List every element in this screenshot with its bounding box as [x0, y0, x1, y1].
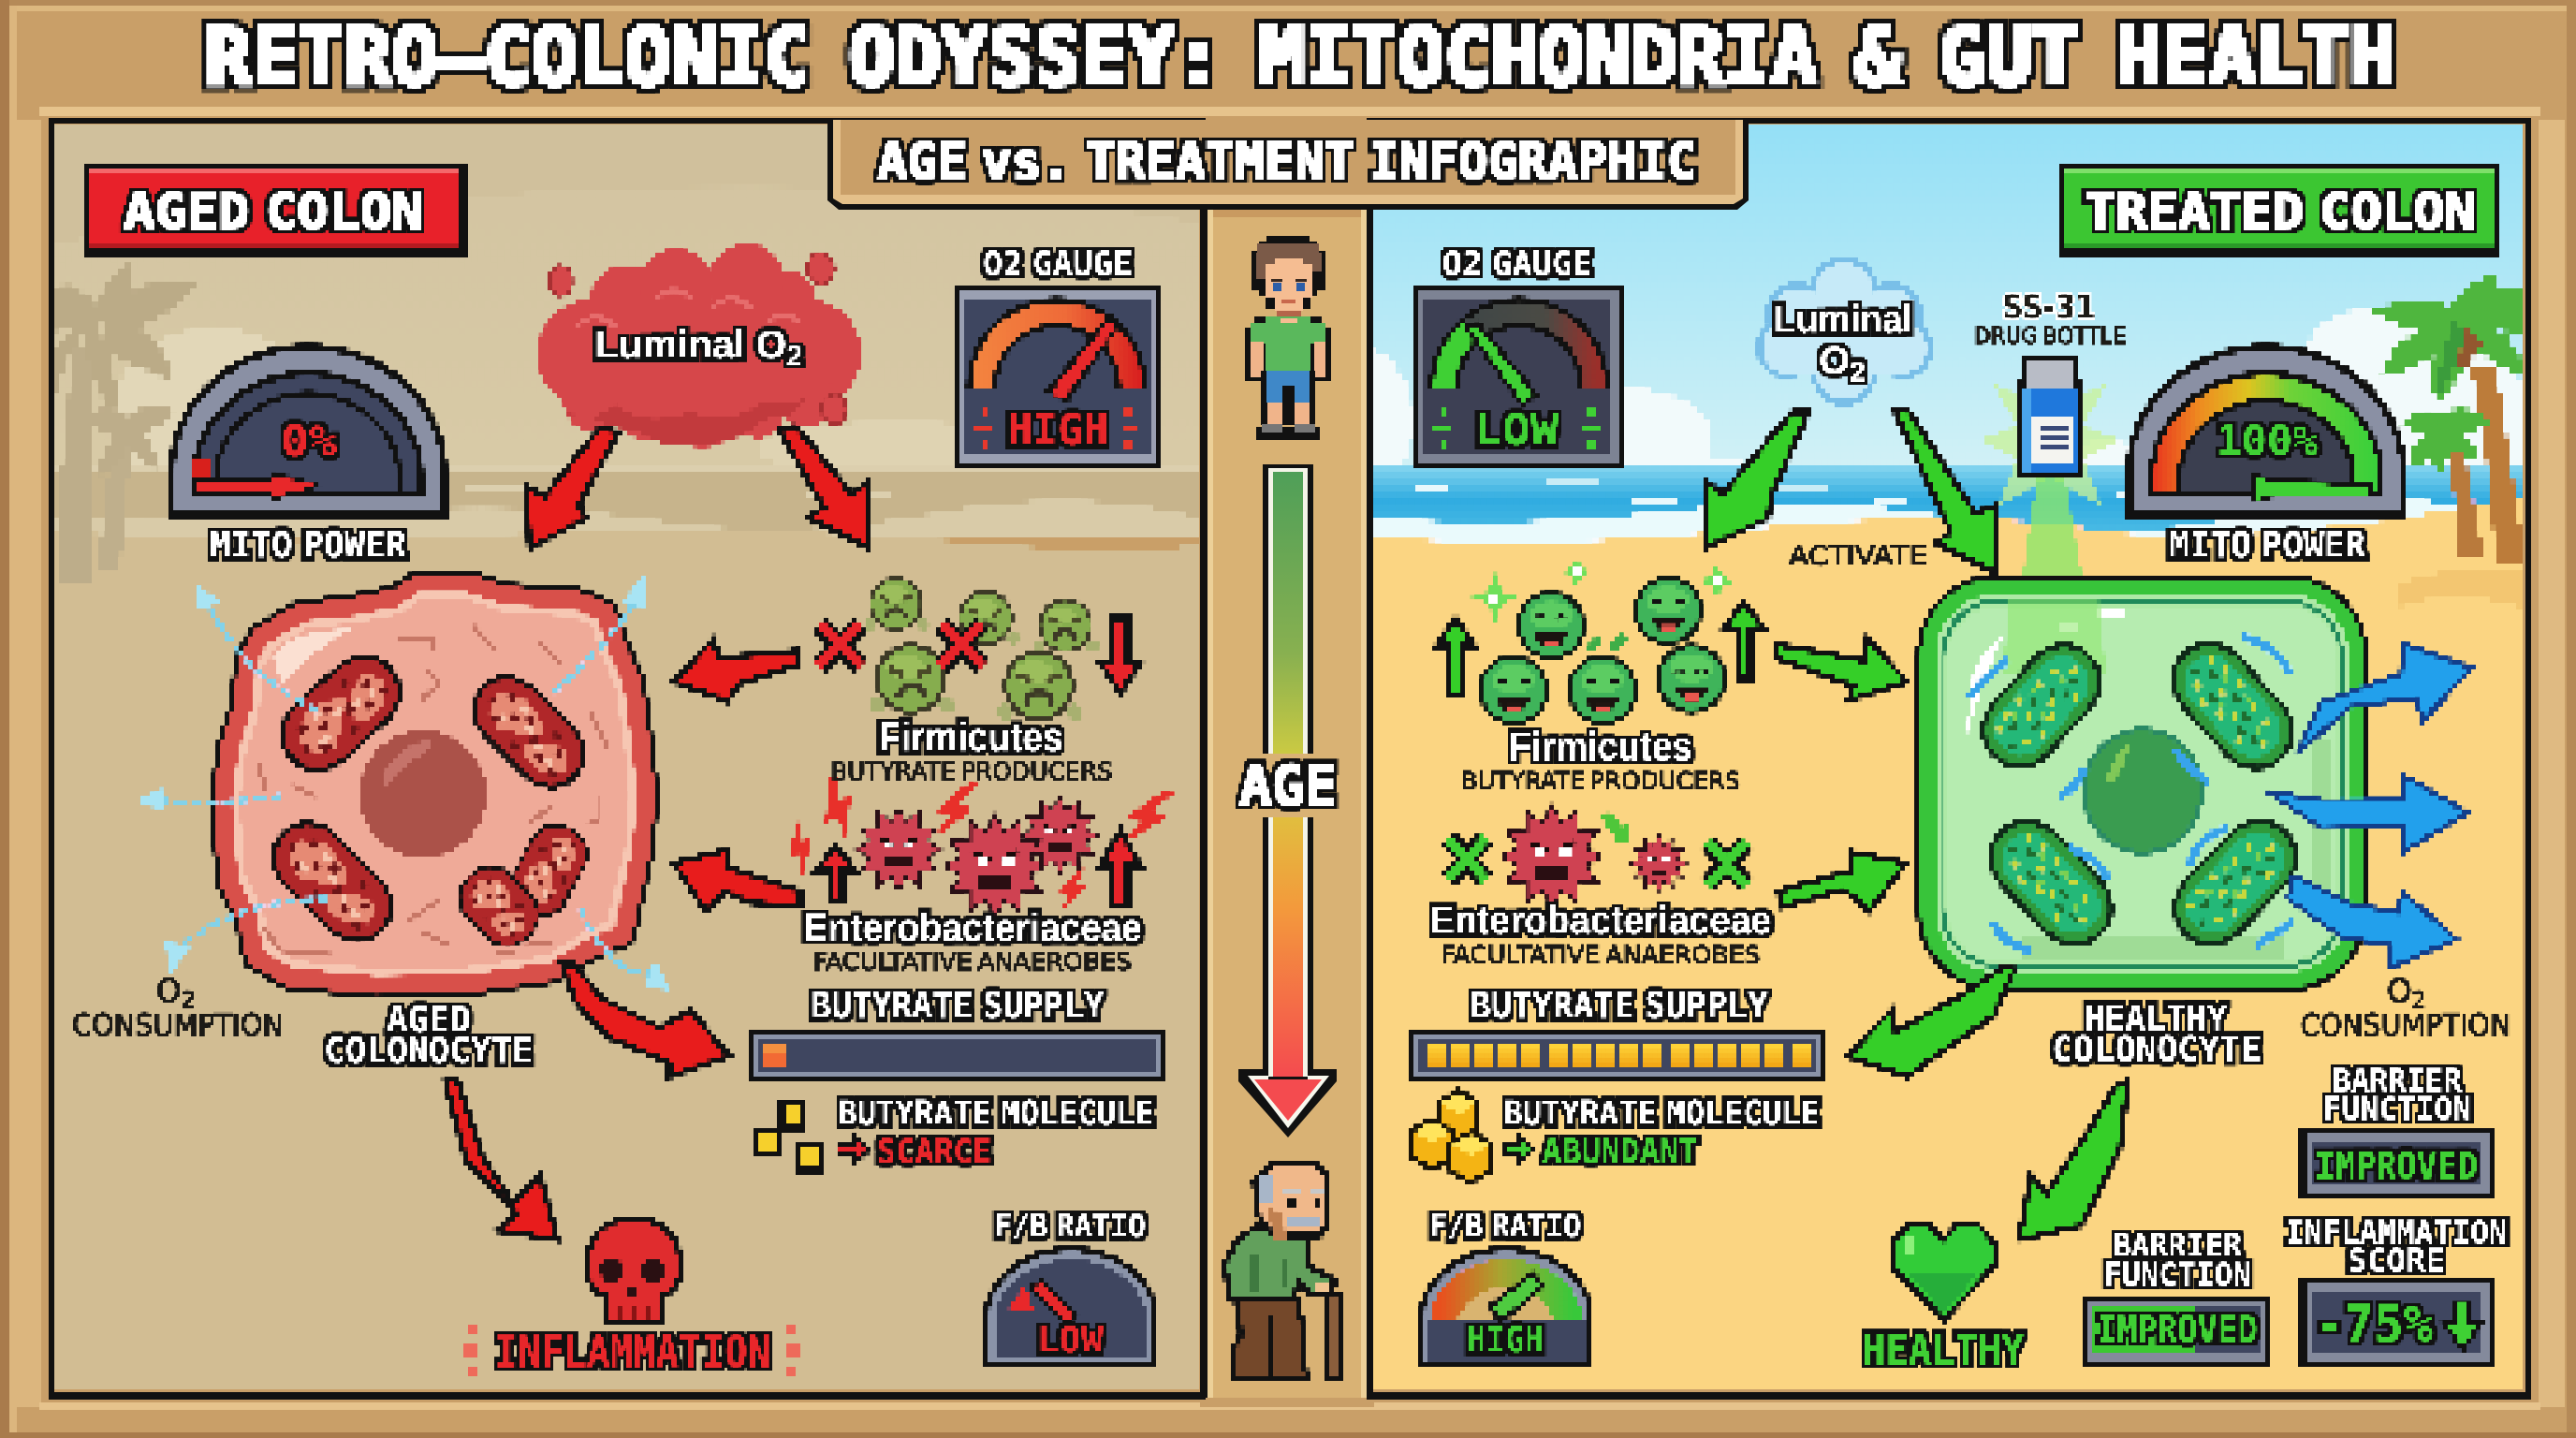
label: enterobacteriaceae: Enterobacteriaceae [803, 905, 1142, 949]
arrow: cell to healthy heart [2019, 1081, 2128, 1240]
cell: healthy colonocyte [1928, 586, 2356, 980]
label: luminal O2: 2 [786, 341, 802, 372]
value: high: HIGH [1007, 404, 1108, 455]
cane shaft [1331, 1296, 1337, 1374]
label: inflammation: INFLAMMATION [2286, 1214, 2507, 1252]
label: drug bottle: DRUG BOTTLE [1974, 323, 2126, 349]
label: butyrate supply: BUTYRATE SUPPLY [811, 985, 1105, 1026]
mito power gauge: 0% [168, 344, 447, 518]
sprite: old man with cane [1224, 1162, 1341, 1379]
treated panel artwork layer [1409, 164, 2500, 1368]
label: aged: AGED [387, 999, 471, 1040]
butyrate molecules: scarce [754, 1101, 870, 1173]
label: function: FUNCTION [2323, 1091, 2471, 1128]
label: butyrate producers: BUTYRATE PRODUCERS [831, 758, 1112, 786]
label: butyrate supply: BUTYRATE SUPPLY [1471, 985, 1768, 1026]
left scene: faded sepia beach [51, 120, 1207, 1395]
arrow: cloud to firmicutes [1706, 412, 1808, 548]
arrow: age gradient bar [1226, 464, 1348, 1137]
arrow: cloud to cell [1895, 410, 1995, 573]
label: barrier lower: BARRIER [2113, 1227, 2243, 1265]
value: -75%: -75% [2314, 1295, 2434, 1354]
firmicutes bacteria: happy [1437, 560, 1764, 726]
arrow: cell to butyrate bar [562, 964, 729, 1077]
label: colonocyte: COLONOCYTE [2052, 1029, 2261, 1070]
firmicutes bacteria: sad [819, 577, 1140, 721]
value: 100%: 100% [2217, 418, 2319, 465]
torso and arm [1224, 1226, 1335, 1299]
gray hair [1258, 1176, 1275, 1204]
cell: aged colonocyte [223, 583, 646, 985]
label: mito power: MITO POWER [210, 524, 406, 565]
panel: aged colon [72, 164, 1177, 1378]
arrow: cloud to cell (left) [526, 427, 618, 548]
value: scarce: SCARCE [876, 1133, 992, 1171]
label: age: AGE [1239, 754, 1337, 819]
arrow: enterobacteria to cell [1778, 852, 1906, 911]
leg gap [1267, 1315, 1273, 1379]
arrow: firmicutes to cell [1776, 639, 1907, 700]
icon: green heart [1892, 1225, 1995, 1320]
eyes [1289, 1196, 1321, 1208]
arrow: cell to butyrate bar [1848, 966, 2014, 1077]
value: low: LOW [1037, 1319, 1104, 1360]
cloud: luminal O2 low [1756, 257, 1933, 406]
sprite: young man [1245, 236, 1331, 440]
treated panel outlined labels [1429, 245, 2507, 1375]
metric box: barrier function upper [2300, 1129, 2494, 1199]
value: high: HIGH [1466, 1319, 1544, 1360]
label: butyrate molecule: BUTYRATE MOLECULE [1503, 1094, 1820, 1133]
label: activate: ACTIVATE [1789, 540, 1927, 571]
metric box: inflammation score [2300, 1279, 2494, 1367]
arrow: enterobacteria to cell [674, 850, 800, 912]
aged panel outlined labels [210, 245, 1154, 1377]
O2 leak arrows from the aged cell [137, 573, 669, 990]
centre column: age axis [1224, 236, 1348, 1379]
value: improved lower: IMPROVED [2097, 1309, 2258, 1352]
value: improved: IMPROVED [2315, 1145, 2478, 1188]
label: colonocyte: COLONOCYTE [324, 1030, 534, 1071]
title banner text: RETRO–COLONIC ODYSSEY: MITOCHONDRIA & GUT HEALTH [205, 11, 2395, 103]
aged panel dark captions [72, 758, 1132, 1043]
label: luminal O2: Luminal O [594, 322, 786, 366]
label: O2 consumption: CONSUMPTION [2301, 1007, 2510, 1043]
hand [1314, 1283, 1331, 1294]
label: healthy status: HEALTHY [1863, 1325, 2025, 1375]
label: O2 gauge: O2 GAUGE [983, 245, 1133, 284]
F/B ratio gauge: high [1419, 1246, 1593, 1368]
label: inflammation: INFLAMMATION [495, 1327, 770, 1377]
arrows: O2 consumption blue [2267, 644, 2471, 967]
F/B ratio gauge: low [984, 1246, 1158, 1368]
label: healthy: HEALTHY [2084, 998, 2228, 1039]
arrow: firmicutes to cell [674, 639, 798, 701]
metric box: barrier function lower [2081, 1296, 2272, 1367]
label: firmicutes: Firmicutes [1509, 724, 1692, 770]
arrow: cell to inflammation [446, 1078, 557, 1240]
moustache [1288, 1219, 1318, 1226]
panel: treated colon [1409, 164, 2510, 1375]
enterobacteriaceae: angry [780, 773, 1177, 919]
badge: aged colon [82, 164, 466, 256]
butyrate molecules: abundant [1410, 1088, 1533, 1185]
drug bottle [2015, 357, 2085, 479]
label: O2: 2 [1850, 357, 1866, 388]
label: O2 symbol: 2 [2412, 987, 2426, 1013]
treated panel dark captions [1442, 288, 2510, 1043]
inflammation sparks [463, 1325, 799, 1378]
label: O2 consumption: CONSUMPTION [72, 1007, 284, 1043]
label: SS-31: SS-31 [2002, 288, 2096, 327]
label: F/B ratio: F/B RATIO [994, 1208, 1146, 1245]
O2 gauge: low [1412, 286, 1623, 470]
label: mito power: MITO POWER [2169, 524, 2365, 565]
shirt folds [1254, 1255, 1284, 1292]
label: O2 symbol: 2 [182, 987, 196, 1013]
label: function lower: FUNCTION [2103, 1256, 2251, 1294]
label: O2 symbol: O [156, 973, 182, 1010]
label: treated colon: TREATED COLON [2085, 184, 2476, 241]
icon: skull [587, 1219, 681, 1321]
label: F/B ratio: F/B RATIO [1429, 1208, 1581, 1245]
subtitle tab: AGE vs. TREATMENT INFOGRAPHIC [878, 132, 1696, 191]
badge: treated colon [2060, 164, 2500, 256]
right scene: bright beach [1301, 120, 2532, 1395]
value: low: LOW [1474, 404, 1559, 455]
head [1254, 1162, 1328, 1236]
label: aged colon: AGED COLON [124, 184, 423, 241]
butyrate supply bar: almost empty [748, 1031, 1166, 1082]
label: butyrate producers: BUTYRATE PRODUCERS [1461, 768, 1740, 796]
value: 0%: 0% [281, 416, 337, 466]
label: facultative anaerobes: FACULTATIVE ANAEROBES [813, 948, 1132, 976]
label: score: SCORE [2348, 1242, 2445, 1280]
brows [1281, 1187, 1325, 1192]
cane [1326, 1290, 1341, 1379]
label: facultative anaerobes: FACULTATIVE ANAEROBES [1442, 942, 1760, 970]
beam: drug light [1980, 370, 2120, 674]
label: O2: O [1819, 338, 1850, 382]
beard shadow [1266, 1206, 1288, 1240]
label: butyrate molecule: BUTYRATE MOLECULE [838, 1094, 1154, 1133]
label: barrier: BARRIER [2333, 1063, 2463, 1100]
arrow: cloud to bacteria (right) [779, 426, 869, 548]
mito power gauge: 100% [2126, 344, 2407, 518]
enterobacteriaceae: shrinking [1448, 803, 1746, 910]
butyrate supply bar: full [1409, 1031, 1827, 1082]
label: enterobacteriaceae: Enterobacteriaceae [1430, 898, 1771, 942]
legs [1234, 1299, 1309, 1379]
label: O2 symbol: O [2387, 973, 2412, 1010]
label: O2 gauge: O2 GAUGE [1442, 245, 1592, 284]
subtitle tab [827, 120, 1749, 210]
aged panel artwork layer [82, 164, 1177, 1378]
cloud: luminal O2 high [537, 243, 861, 448]
label: firmicutes: Firmicutes [878, 714, 1063, 760]
value: abundant: ABUNDANT [1543, 1133, 1698, 1171]
label: luminal: Luminal [1774, 297, 1912, 341]
O2 gauge: high [953, 286, 1163, 470]
